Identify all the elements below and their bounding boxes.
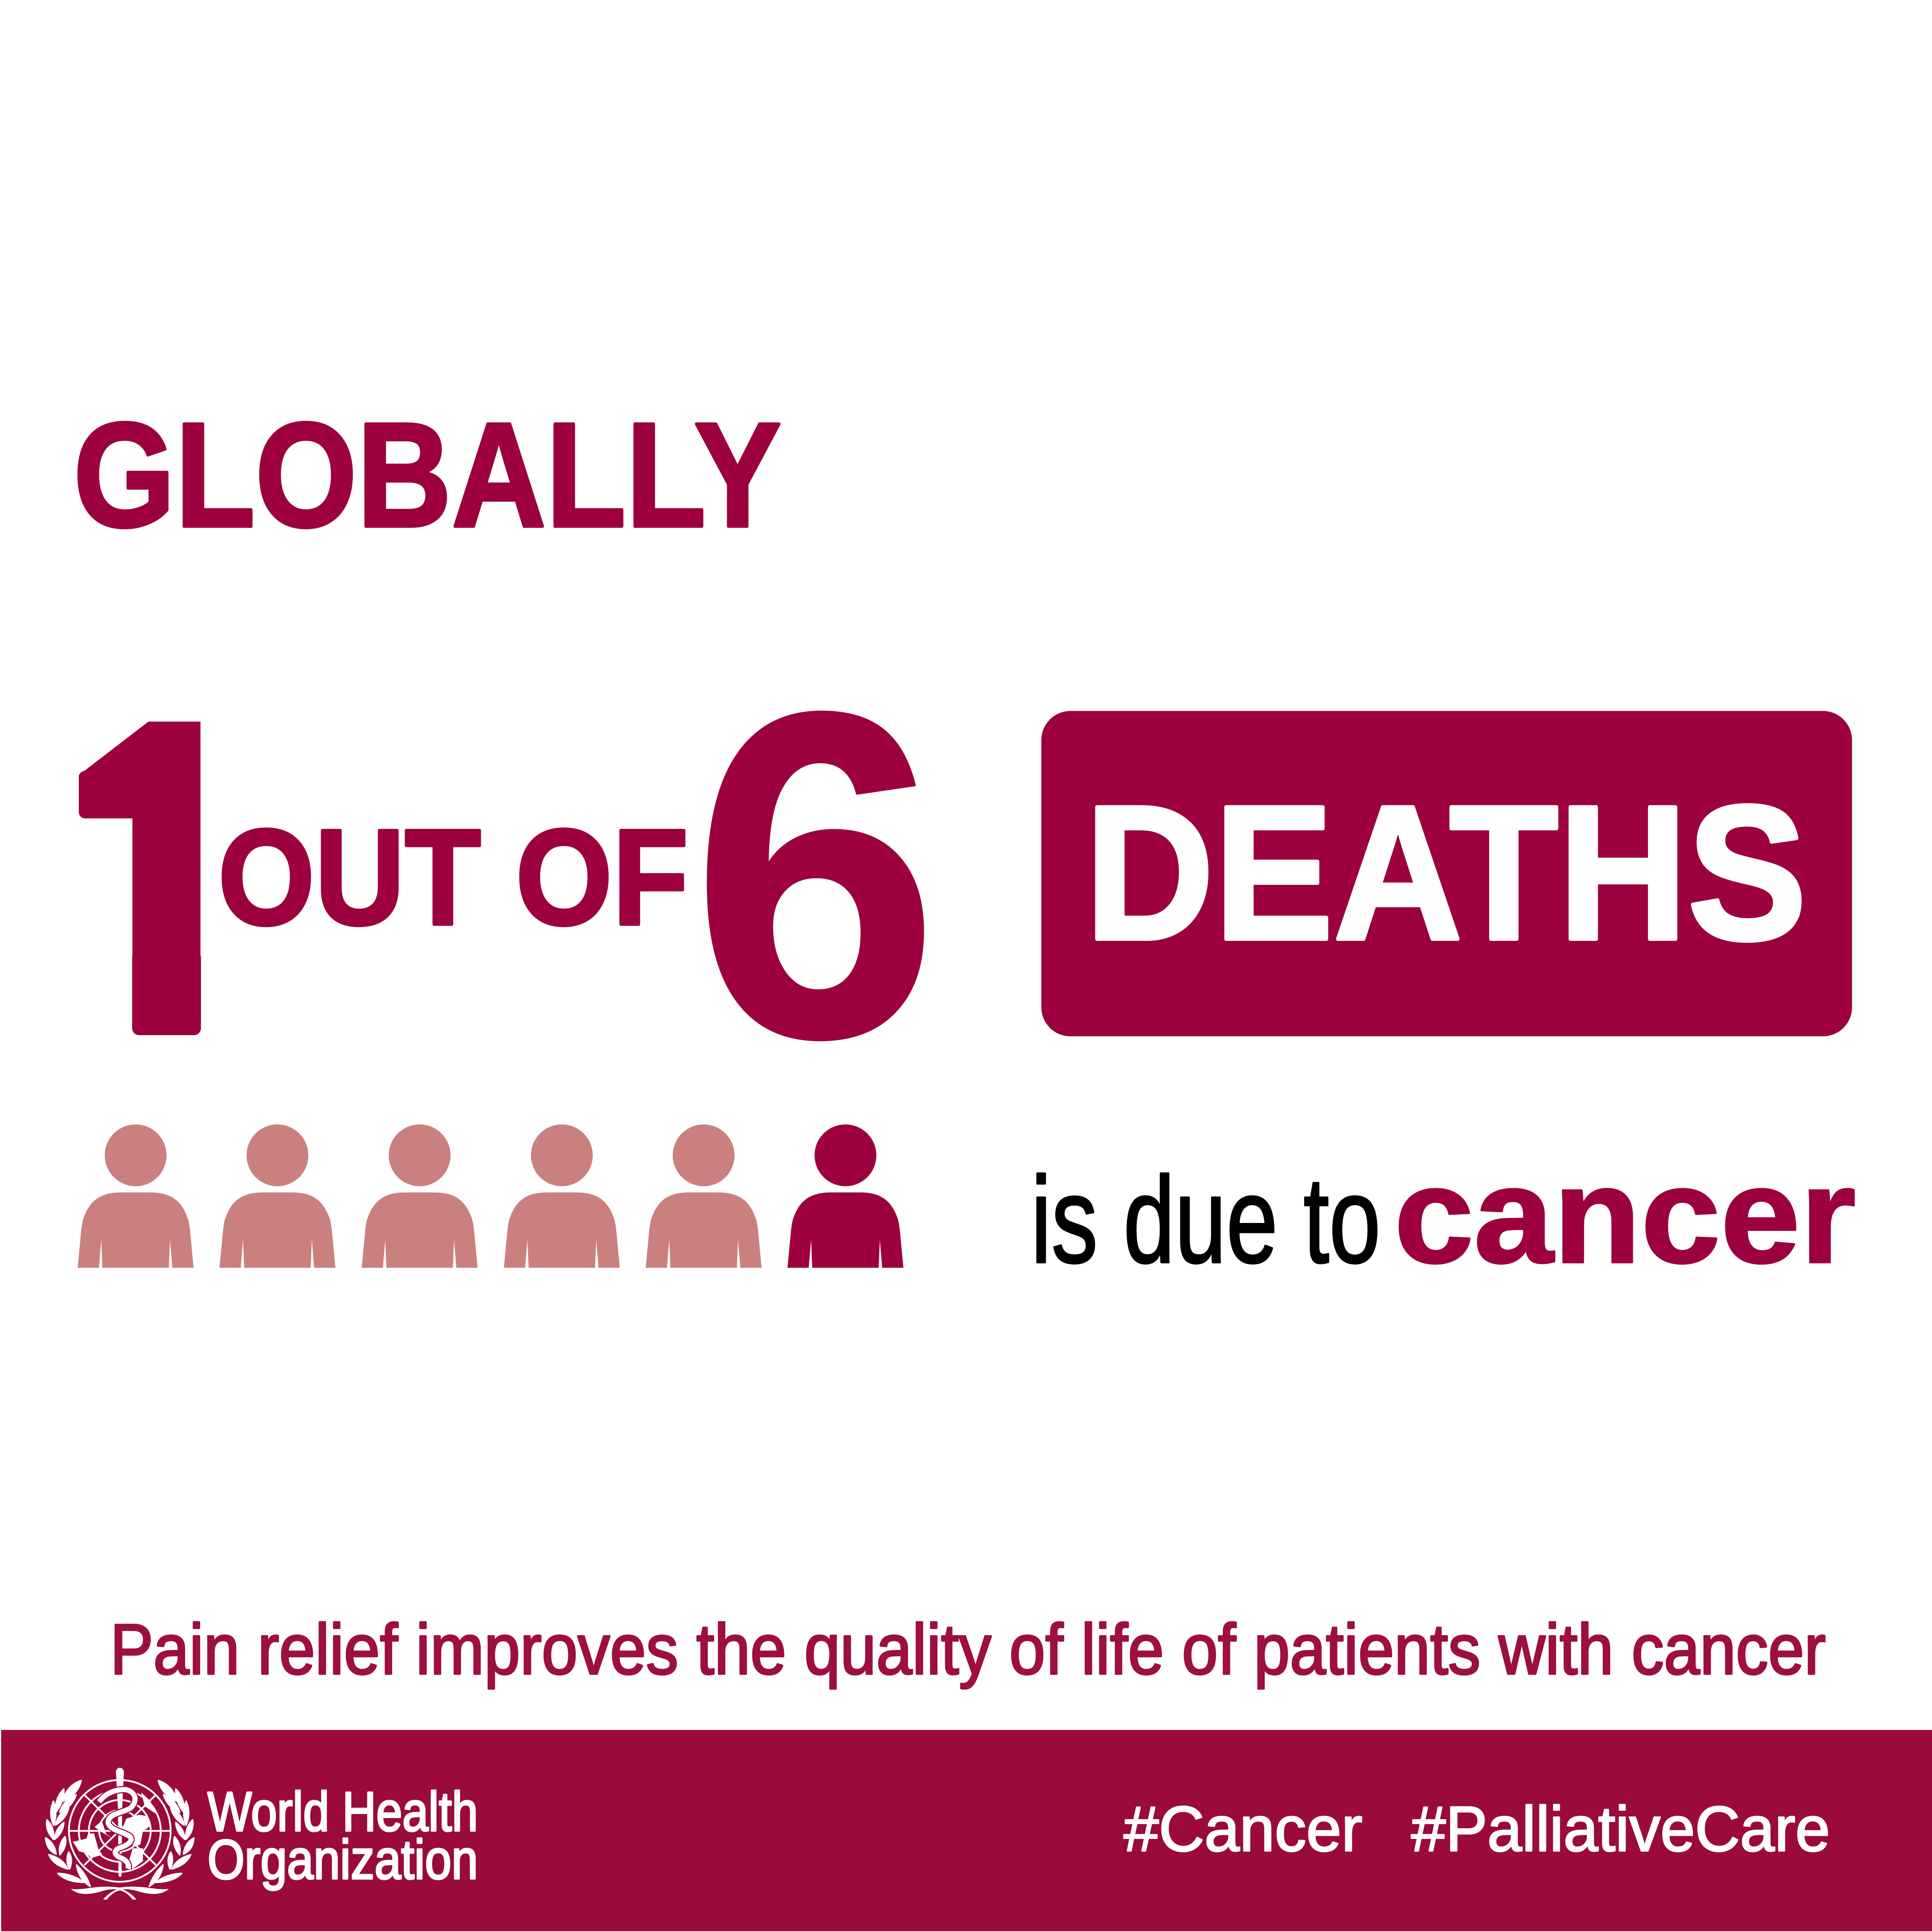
icon: person 1	[78, 1124, 194, 1268]
text: Organization: Organization	[207, 1828, 478, 1891]
icon: person 3	[362, 1124, 478, 1268]
text: cancer: cancer	[1394, 1139, 1856, 1291]
laurel wreath	[46, 1781, 90, 1886]
hashtag: PalliativeCare: #PalliativeCare	[1411, 1793, 1830, 1864]
big number 1	[79, 722, 201, 1035]
footer band	[1, 1730, 1932, 1931]
staff and serpent	[116, 1768, 124, 1877]
big number 6: 6	[692, 616, 939, 1134]
pictogram: six people, one highlighted	[78, 1124, 903, 1268]
text: DEATHS: DEATHS	[1085, 766, 1807, 980]
panel: DEATHS callout	[1041, 711, 1852, 1036]
organisation name	[207, 1781, 478, 1891]
globe rings and grid	[69, 1780, 171, 1882]
text: is due to: is due to	[1031, 1151, 1381, 1289]
icon: person 4	[504, 1124, 620, 1268]
icon: person 6 highlighted	[787, 1124, 903, 1268]
continents	[73, 1792, 156, 1869]
ribbon	[71, 1887, 169, 1900]
icon: person 5	[646, 1124, 762, 1268]
big number 1: 1	[17, 624, 293, 1127]
hashtag: Cancer: #Cancer	[1124, 1793, 1362, 1864]
heading: GLOBALLY: GLOBALLY	[73, 391, 781, 558]
text: OUT OF: OUT OF	[218, 801, 689, 953]
text: World Health: World Health	[207, 1781, 478, 1843]
logo: WHO emblem	[46, 1768, 194, 1900]
icon: person 2	[219, 1124, 335, 1268]
